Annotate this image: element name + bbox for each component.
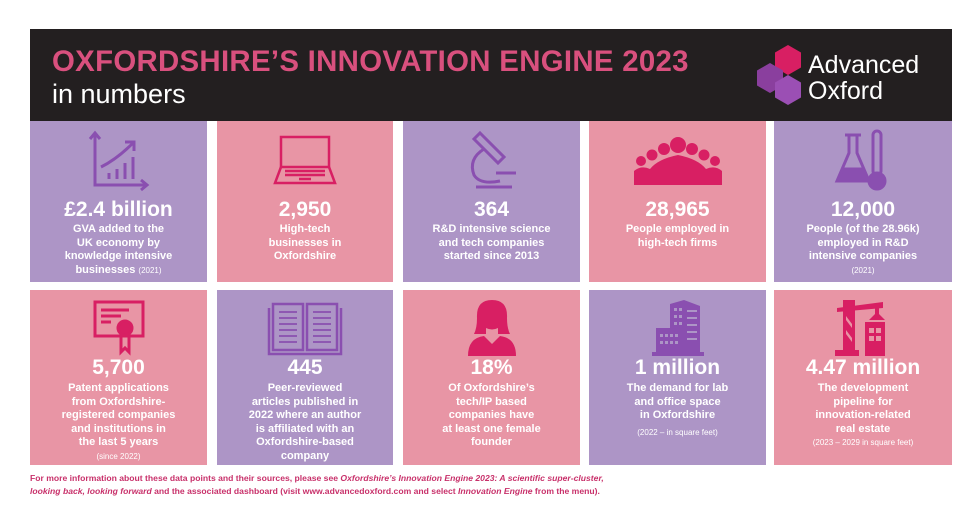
- subtitle: in numbers: [52, 79, 186, 109]
- panel: female founders: Of Oxfordshire’s: [448, 382, 535, 394]
- panel: GVA: [30, 121, 207, 282]
- footer note: For more information about these data points and their sources, please see Oxfordshire’s Innovation Engine 2023: A scientific super-cluster,: [30, 473, 604, 483]
- icon: certificate: [94, 300, 144, 356]
- panel: patents: registered companies: [62, 409, 175, 421]
- logo: Advanced Oxford: Oxford: [808, 77, 883, 105]
- icon: crane and building: [835, 300, 885, 356]
- panel: people employed: People employed in: [626, 223, 729, 235]
- panel: articles: company: [281, 450, 329, 462]
- panel: GVA: knowledge intensive: [65, 250, 172, 262]
- icon: laptop: [273, 136, 337, 184]
- panel: patents: from Oxfordshire-: [72, 396, 165, 408]
- panel: high-tech businesses: High-tech: [280, 223, 330, 235]
- panel: female founders: [403, 290, 580, 465]
- panel: R&D companies: 364: [474, 198, 509, 221]
- panel: development pipeline: 4.47 million: [806, 356, 920, 379]
- panel: articles: 445: [287, 356, 323, 379]
- panel: GVA: GVA added to the: [73, 223, 164, 235]
- panel: R&D companies: started since 2013: [444, 250, 539, 262]
- panel: development pipeline: (2023 – 2029 in square feet): [813, 438, 913, 447]
- footer note: [30, 473, 604, 496]
- panel: female founders: founder: [471, 436, 512, 448]
- title: OXFORDSHIRE’S INNOVATION ENGINE 2023: [52, 45, 689, 78]
- panel: patents: 5,700: [92, 356, 145, 379]
- panel: development pipeline: innovation-related: [815, 409, 911, 421]
- panel: GVA: £2.4 billion: [64, 198, 173, 221]
- icon: crowd: [634, 137, 722, 185]
- icon: microscope: [470, 131, 516, 188]
- panel: lab demand: [589, 290, 766, 465]
- panel: development pipeline: The development: [818, 382, 908, 394]
- logo: Advanced Oxford: [757, 45, 919, 105]
- logo: Advanced Oxford: Advanced: [808, 51, 919, 79]
- panel: R&D employment: employed in R&D: [817, 236, 909, 248]
- panel: lab demand: The demand for lab: [627, 382, 728, 394]
- header band: [30, 29, 952, 121]
- panel: R&D employment: 12,000: [831, 198, 895, 221]
- panel: patents: Patent applications: [68, 382, 169, 394]
- panel: lab demand: in Oxfordshire: [640, 409, 715, 421]
- panel: lab demand: (2022 – in square feet): [637, 428, 718, 436]
- panel: R&D companies: and tech companies: [439, 236, 544, 248]
- panel: GVA: UK economy by: [77, 236, 160, 248]
- icon: growth chart: [89, 130, 150, 191]
- footer note: looking back, looking forward and the associated dashboard (visit www.advancedoxford.com and select Innovation Engine from the menu).: [30, 486, 600, 496]
- panel: people employed: high-tech firms: [638, 236, 717, 248]
- panel: high-tech businesses: businesses in: [269, 236, 341, 248]
- panel: patents: [30, 290, 207, 465]
- panel: R&D employment: People (of the 28.96k): [806, 223, 920, 235]
- panel: articles: Oxfordshire-based: [256, 436, 354, 448]
- icon: office building: [652, 300, 704, 356]
- icon: woman: [468, 300, 516, 356]
- panel: patents: the last 5 years: [79, 436, 158, 448]
- panel: articles: is affiliated with an: [256, 422, 354, 434]
- panel: female founders: tech/IP based: [456, 396, 527, 408]
- panel: articles: [217, 290, 393, 465]
- panel: R&D employment: intensive companies: [809, 250, 917, 262]
- panel: lab demand: 1 million: [635, 356, 720, 379]
- panel: R&D companies: [403, 121, 580, 282]
- icon: open book: [268, 302, 342, 356]
- panel: GVA: businesses (2021): [75, 264, 162, 276]
- panel: lab demand: and office space: [634, 396, 721, 408]
- panel: high-tech businesses: [217, 121, 393, 282]
- panel: articles: 2022 where an author: [249, 409, 361, 421]
- panel: people employed: 28,965: [645, 198, 710, 221]
- panel: development pipeline: [774, 290, 952, 465]
- panel: development pipeline: pipeline for: [833, 396, 893, 408]
- panel: R&D companies: R&D intensive science: [432, 223, 550, 235]
- panel: patents: and institutions in: [71, 422, 166, 434]
- panel: female founders: companies have: [449, 409, 534, 421]
- panel: R&D employment: [774, 121, 952, 282]
- icon: flask and thermometer: [834, 130, 886, 190]
- panel: high-tech businesses: Oxfordshire: [274, 250, 336, 262]
- panel: development pipeline: real estate: [836, 422, 890, 434]
- panel: R&D employment: (2021): [851, 266, 875, 274]
- panel: articles: articles published in: [252, 396, 358, 408]
- panel: people employed: [589, 121, 766, 282]
- panel: female founders: 18%: [470, 356, 513, 379]
- panel: high-tech businesses: 2,950: [279, 198, 331, 221]
- panel: articles: Peer-reviewed: [268, 382, 342, 394]
- panel: patents: (since 2022): [96, 452, 141, 460]
- panel: female founders: at least one female: [442, 422, 541, 434]
